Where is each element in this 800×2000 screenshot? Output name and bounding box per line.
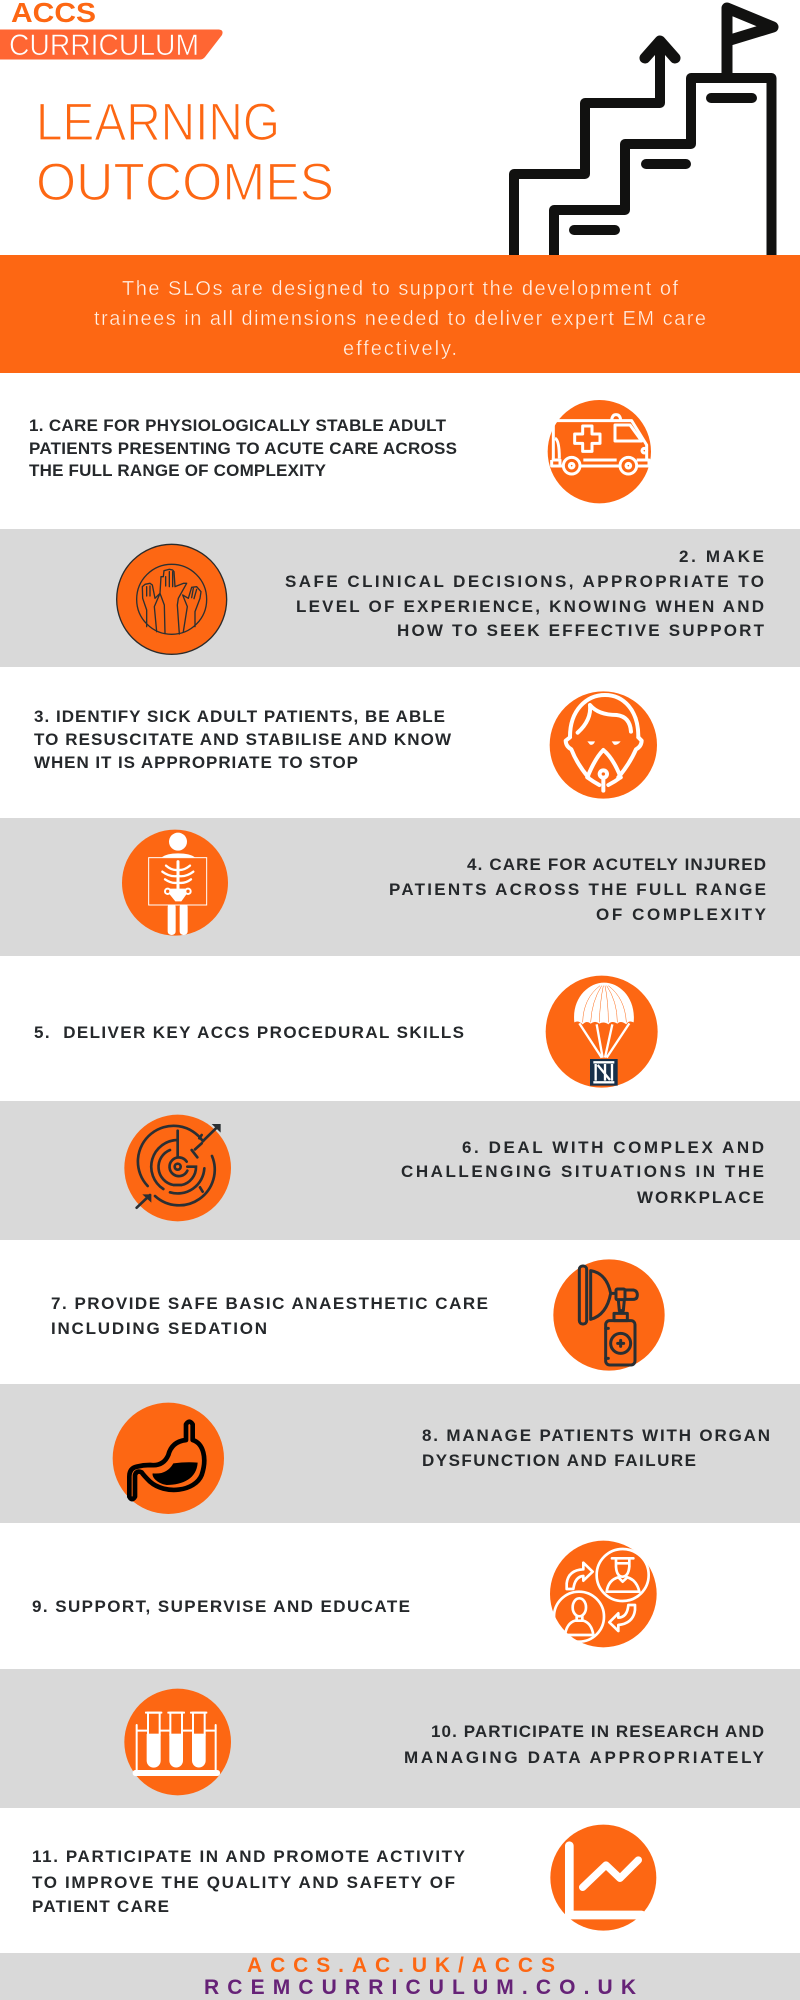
logo: ACCS Curriculum (0, 0, 223, 62)
outcome 10 text (404, 1722, 765, 1767)
footer: website links: RCEMCURRICULUM.CO.UK (204, 1976, 636, 1999)
icon: patient with oxygen mask (550, 691, 657, 799)
outcome 4 text: OF COMPLEXITY (596, 905, 767, 924)
outcome 5 text: 5. DELIVER KEY ACCS PROCEDURAL SKILLS (34, 1023, 464, 1042)
outcome 1 text (29, 416, 457, 480)
icon: people exchanging roles (550, 1541, 657, 1647)
outcome 7 text: 7. PROVIDE SAFE BASIC ANAESTHETIC CARE (51, 1294, 488, 1313)
icon: stomach (113, 1403, 224, 1514)
outcome 6 text: CHALLENGING SITUATIONS IN THE (401, 1162, 764, 1181)
outcome 4 text (389, 855, 767, 924)
outcome 3 text: WHEN IT IS APPROPRIATE TO STOP (34, 753, 358, 772)
outcome 9 text: 9. SUPPORT, SUPERVISE AND EDUCATE (32, 1597, 410, 1616)
outcome 7 text: INCLUDING SEDATION (51, 1319, 267, 1338)
outcome 1 text: THE FULL RANGE OF COMPLEXITY (29, 461, 327, 480)
outcome 2 text (285, 547, 765, 640)
logo: ACCS Curriculum: CURRICULUM (9, 29, 199, 62)
title: Learning Outcomes: LEARNING (36, 93, 280, 152)
icon: raised hands (117, 544, 227, 654)
footer: website links: ACCS.AC.UK/ACCS (247, 1954, 555, 1977)
title: Learning Outcomes (36, 93, 334, 212)
outcome 10 text: MANAGING DATA APPROPRIATELY (404, 1748, 765, 1767)
outcome 4 text: PATIENTS ACROSS THE FULL RANGE (389, 880, 766, 899)
outcome 6 text (401, 1138, 764, 1207)
outcome 6 text: 6. DEAL WITH COMPLEX AND (462, 1138, 764, 1157)
outcome 3 text (34, 707, 452, 772)
banner: intro statement: trainees in all dimensions needed to deliver expert EM care (94, 308, 706, 330)
icon: maze with arrows (124, 1115, 231, 1221)
outcome 3 text: 3. IDENTIFY SICK ADULT PATIENTS, BE ABLE (34, 707, 445, 726)
outcome 8 text: 8. MANAGE PATIENTS WITH ORGAN (422, 1426, 770, 1445)
outcome 8 text (422, 1426, 770, 1470)
outcome 10 text: 10. PARTICIPATE IN RESEARCH AND (431, 1722, 764, 1741)
outcome 2 text: HOW TO SEEK EFFECTIVE SUPPORT (397, 621, 765, 640)
icon: test tubes (124, 1689, 231, 1795)
outcome 2 text: SAFE CLINICAL DECISIONS, APPROPRIATE TO (285, 572, 764, 591)
outcome 1 text: 1. CARE FOR PHYSIOLOGICALLY STABLE ADULT (29, 416, 447, 435)
outcome 8 text: DYSFUNCTION AND FAILURE (422, 1451, 696, 1470)
outcome 6 text: WORKPLACE (637, 1188, 764, 1207)
banner: intro statement (0, 255, 800, 373)
icon: line chart (550, 1825, 656, 1931)
outcome 3 text: TO RESUSCITATE AND STABILISE AND KNOW (34, 730, 452, 749)
outcome 7 text (51, 1294, 488, 1338)
outcome 1 text: PATIENTS PRESENTING TO ACUTE CARE ACROSS (29, 439, 457, 458)
icon: ambulance (548, 400, 651, 503)
icon: bag valve mask (553, 1259, 665, 1371)
outcome 11 text: 11. PARTICIPATE IN AND PROMOTE ACTIVITY (32, 1847, 466, 1866)
title: Learning Outcomes: OUTCOMES (36, 153, 334, 212)
outcome 4 text: 4. CARE FOR ACUTELY INJURED (467, 855, 766, 874)
outcome 11 text: TO IMPROVE THE QUALITY AND SAFETY OF (32, 1873, 455, 1892)
icon: x-ray skeleton (122, 830, 228, 936)
outcome 2 text: 2. MAKE (679, 547, 764, 566)
banner: intro statement: effectively. (343, 338, 457, 360)
icon: parachute with crate (546, 976, 658, 1088)
banner: intro statement: The SLOs are designed to support the development of (122, 278, 678, 300)
outcome 2 text: LEVEL OF EXPERIENCE, KNOWING WHEN AND (296, 597, 764, 616)
icon: stairs with arrow and flag (514, 8, 773, 255)
outcome 11 text: PATIENT CARE (32, 1897, 169, 1916)
footer: website links (0, 1953, 800, 2000)
outcome 11 text (32, 1847, 466, 1916)
